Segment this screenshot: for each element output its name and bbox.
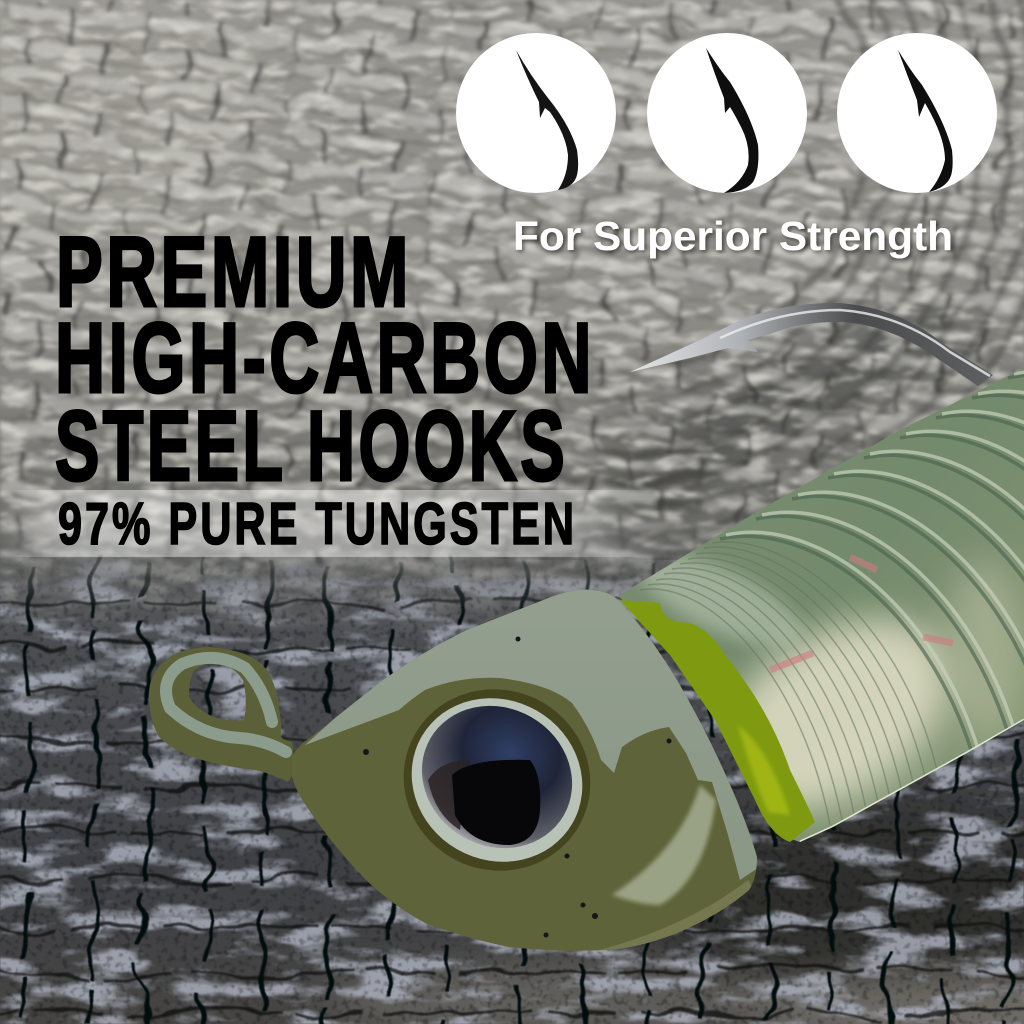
heading: premium high-carbon steel hooks [55,216,595,501]
circle: hook detail 1 [456,33,616,193]
chartreuse core [620,600,815,842]
caption: for superior strength: For Superior Strength [513,213,953,259]
lure tungsten head [149,580,770,965]
subheading band: 97% pure tungsten: 97% PURE TUNGSTEN [58,491,577,557]
head shape [292,590,757,951]
circle: hook detail 2 [647,33,807,193]
hook detail circles [456,33,997,193]
line tie eyelet [149,647,296,782]
eye [374,659,620,901]
heading: premium high-carbon steel hooks: STEEL HOOKS [55,390,568,501]
head speckles [363,636,672,938]
steel hook on lure [630,303,993,386]
heading: premium high-carbon steel hooks: PREMIUM [56,216,412,327]
pale glow on body [736,599,964,830]
heading: premium high-carbon steel hooks: HIGH-CARBON [55,302,595,413]
circle: hook detail 3 [837,33,997,193]
glossy reflection [305,580,770,880]
lure soft plastic body [618,368,1024,849]
body ribs [640,371,1024,842]
